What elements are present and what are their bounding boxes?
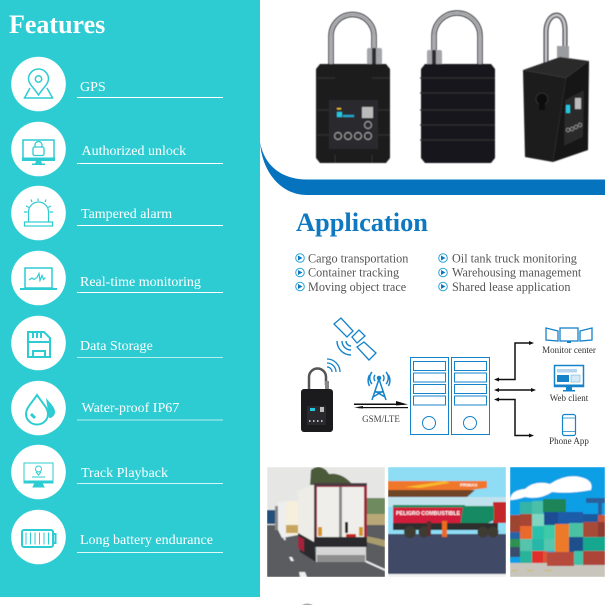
photo: oil tank truck at fuel station: PRIMAX [460, 482, 478, 488]
panel: features [0, 0, 260, 597]
feature: Long battery endurance: Long battery endurance [80, 533, 213, 548]
container grid [520, 499, 605, 566]
server rack [410, 358, 490, 434]
photo: oil tank truck at fuel station: PELIGRO COMBUSTIBLE [396, 511, 461, 517]
photo: refrigerated trucks on highway [267, 467, 385, 577]
product photos: padlocks [316, 13, 589, 163]
client: Monitor center [542, 328, 596, 355]
icon: water drops [26, 395, 55, 425]
application list: right column: Warehousing management [452, 266, 582, 280]
feature: Water-proof IP67: Water-proof IP67 [82, 401, 179, 416]
label: GSM/LTE: GSM/LTE [362, 414, 400, 424]
photo: stacked shipping containers [510, 467, 605, 577]
client: Web client: Web client [550, 393, 589, 403]
cropped element at bottom edge [302, 604, 313, 605]
icon: memory card [28, 332, 50, 357]
client: Phone App [549, 414, 589, 446]
application list: left column [296, 252, 408, 294]
feature: Data Storage: Data Storage [80, 339, 153, 354]
application list: right column: Shared lease application [452, 280, 570, 294]
feature: Real-time monitoring [11, 251, 223, 305]
heading: Application: Application [296, 207, 428, 237]
client: Monitor center: Monitor center [542, 345, 596, 355]
feature: Track Playback: Track Playback [81, 466, 168, 481]
feature: GPS [11, 57, 223, 111]
application list: left column: Cargo transportation [308, 252, 408, 266]
icon: map pin [24, 69, 52, 98]
feature: Track Playback [11, 445, 223, 499]
heading: Features: Features [9, 10, 105, 39]
feature: Authorized unlock: Authorized unlock [82, 144, 186, 159]
feature: Water-proof IP67 [11, 381, 223, 435]
photo: oil tank truck at fuel station [388, 467, 506, 577]
feature: Real-time monitoring: Real-time monitoring [80, 275, 201, 290]
icon: small padlock [301, 368, 333, 432]
icon: laptop with pulse [20, 268, 57, 289]
feature: Long battery endurance [11, 510, 223, 564]
feature: GPS: GPS [80, 80, 106, 95]
icon: cell tower [368, 372, 390, 400]
feature: Tampered alarm [11, 186, 223, 240]
icon: satellite [334, 318, 376, 360]
icon: monitor with location [24, 463, 53, 487]
blue swoosh band [260, 142, 605, 195]
application list: right column: Oil tank truck monitoring [452, 252, 577, 266]
client: Phone App: Phone App [549, 436, 589, 446]
padlock: back view [420, 13, 495, 163]
arrows: server to clients [494, 341, 536, 438]
application list: left column: Moving object trace [308, 280, 406, 294]
padlock: front view [316, 14, 390, 163]
feature: Data Storage [11, 316, 223, 370]
padlock: side view [523, 15, 589, 162]
feature: Authorized unlock [11, 122, 223, 176]
application list: right column [439, 252, 582, 294]
network diagram [301, 318, 596, 446]
icon: siren [24, 198, 53, 226]
application list: left column: Container tracking [308, 266, 399, 280]
arrows: GSM/LTE link [354, 401, 408, 408]
icon: wireless signal [327, 359, 340, 372]
icon: battery [22, 530, 56, 547]
icon: monitor with padlock [22, 140, 55, 165]
feature: Tampered alarm: Tampered alarm [81, 207, 172, 222]
client: Web client [550, 366, 589, 403]
